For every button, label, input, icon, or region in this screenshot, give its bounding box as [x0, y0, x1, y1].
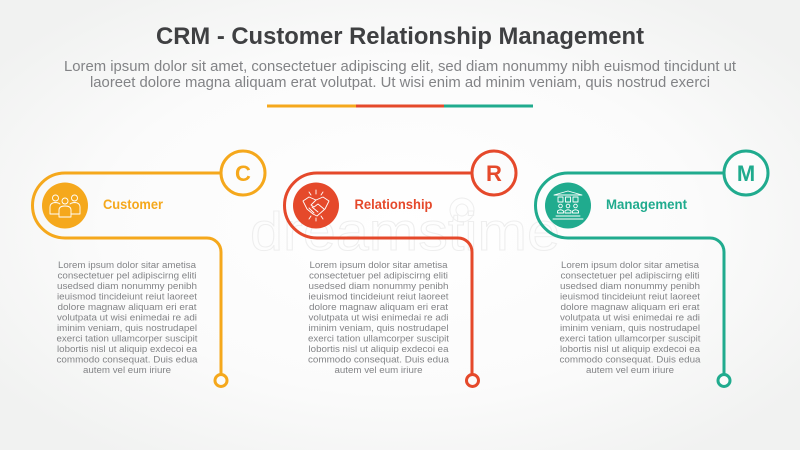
text block: relationship: usedsed diam nonummy penibh [308, 281, 448, 291]
panel: relationship [284, 151, 516, 386]
text block: customer: Lorem ipsum dolor sitar ametisa [58, 260, 196, 270]
intro text: laoreet dolore magna aliquam erat volutpat. Ut wisi enim ad minim veniam, quis nostrud exerci [90, 75, 710, 91]
text block: relationship: exerci tation ullamcorper suscipit [308, 334, 450, 344]
text block: customer: ieuismod tincideiunt reiut laoreet [57, 292, 198, 302]
panel: customer [32, 151, 265, 386]
text block: relationship: consectetuer pel adipiscirng eliti [309, 270, 448, 280]
panel: management [536, 151, 768, 386]
label: management: Management [606, 197, 687, 212]
text block: customer [56, 260, 198, 375]
outline path: management [536, 173, 724, 374]
text block: relationship: volutpata ut wisi enimedai re adi [308, 312, 448, 322]
end node: relationship [466, 374, 478, 386]
text block: relationship: autem vel eum iriure [334, 365, 422, 375]
letter badge: M [724, 151, 768, 195]
text block: customer: consectetuer pel adipiscirng eliti [58, 270, 196, 280]
label: relationship: Relationship [354, 197, 432, 212]
text block: management: volutpata ut wisi enimedai re adi [560, 312, 700, 322]
text block: management: usedsed diam nonummy penibh [560, 281, 700, 291]
letter badge: C: C [235, 161, 251, 186]
text: dreamstime [250, 202, 560, 262]
icon: handshake [293, 182, 339, 228]
letter badge: R [472, 151, 516, 195]
icon: people group [42, 182, 88, 228]
text block: management: Lorem ipsum dolor sitar ametisa [561, 260, 699, 270]
text block: customer: dolore magnaw aliquam eri erat [58, 302, 197, 312]
text block: customer: usedsed diam nonummy penibh [57, 281, 197, 291]
title: CRM - Customer Relationship Management [156, 23, 644, 50]
text block: customer: iminim veniam, quis nostrudapel [57, 323, 197, 333]
outline path: relationship [284, 173, 472, 374]
text block: relationship: iminim veniam, quis nostrudapel [308, 323, 448, 333]
letter badge: M: M [737, 161, 755, 186]
tricolor divider bar [267, 104, 533, 108]
text block: management: dolore magnaw aliquam eri erat [560, 302, 700, 312]
label: customer: Customer [103, 197, 164, 212]
text block: relationship: dolore magnaw aliquam eri erat [309, 302, 449, 312]
text block: relationship: lobortis nisl ut aliquip exdecoi ea [308, 344, 448, 354]
intro text: Lorem ipsum dolor sit amet, consectetuer adipiscing elit, sed diam nonummy nibh euismod tincidunt ut [64, 59, 736, 75]
text block: customer: autem vel eum iriure [83, 365, 171, 375]
text block: relationship: Lorem ipsum dolor sitar ametisa [310, 260, 448, 270]
end node: customer [215, 374, 227, 386]
text block: management: iminim veniam, quis nostrudapel [560, 323, 700, 333]
text block: management: ieuismod tincideiunt reiut laoreet [560, 292, 701, 302]
intro text [64, 59, 736, 91]
text block: relationship: ieuismod tincideiunt reiut laoreet [308, 292, 449, 302]
letter badge: C [221, 151, 265, 195]
text block: management: commodo consequat. Duis edua [560, 354, 700, 364]
outline path: customer [32, 173, 221, 374]
text block: customer: volutpata ut wisi enimedai re adi [57, 312, 197, 322]
letter badge: R: R [486, 161, 502, 186]
text block: management: consectetuer pel adipiscirng eliti [560, 270, 700, 280]
text block: management: exerci tation ullamcorper suscipit [560, 334, 701, 344]
text block: management: autem vel eum iriure [586, 365, 674, 375]
text block: customer: exerci tation ullamcorper suscipit [56, 334, 198, 344]
text block: management: lobortis nisl ut aliquip exdecoi ea [560, 344, 700, 354]
end node: management [718, 374, 730, 386]
text block: customer: lobortis nisl ut aliquip exdecoi ea [57, 344, 197, 354]
icon: institution building [545, 182, 591, 228]
text block: relationship: commodo consequat. Duis edua [308, 354, 449, 364]
text block: customer: commodo consequat. Duis edua [56, 354, 198, 364]
text block: relationship [308, 260, 450, 375]
text block: management [560, 260, 701, 375]
